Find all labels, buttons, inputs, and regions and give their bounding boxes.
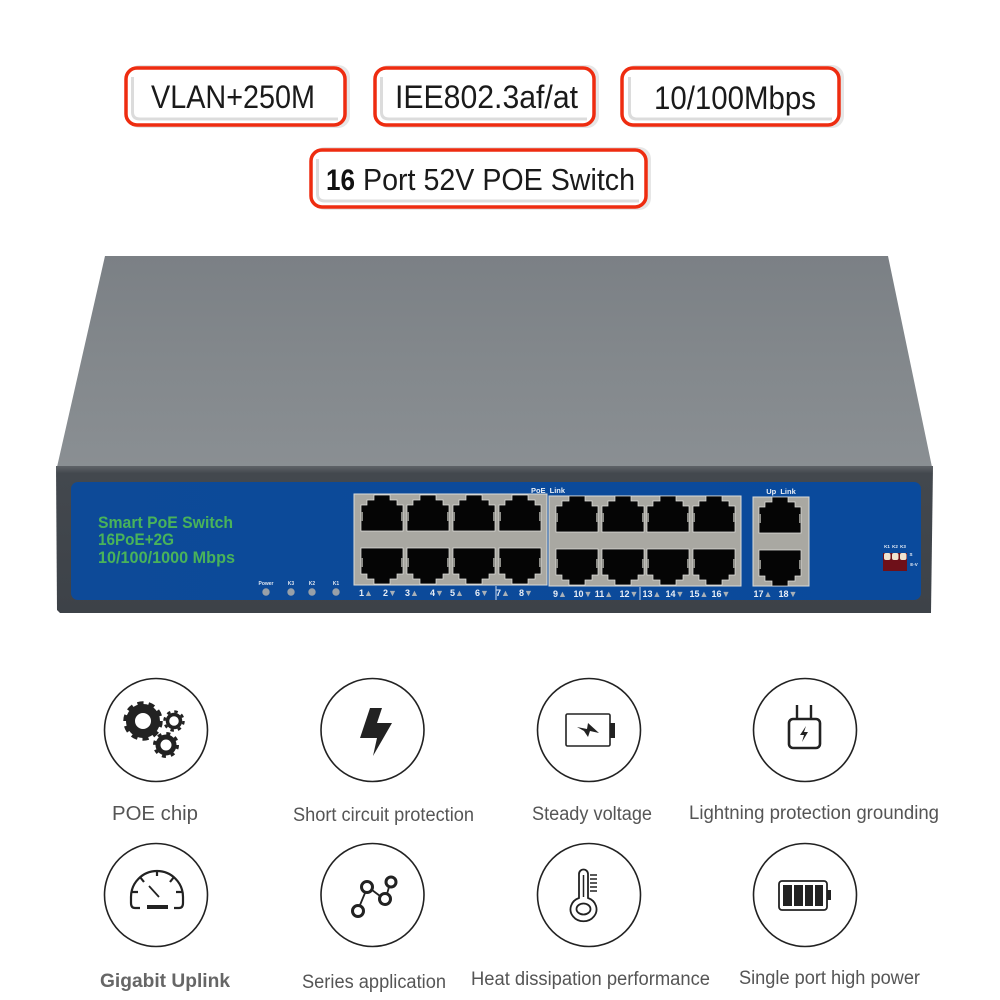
feature: Series application: Series application (302, 972, 446, 993)
feature: Short circuit protection (293, 678, 474, 826)
DIP switch: K2 (892, 544, 898, 549)
icon: gears (126, 704, 184, 756)
DIP switch: K1 (884, 544, 890, 549)
port block 1-8 (354, 494, 547, 585)
port numbers: 4▼ (430, 588, 444, 598)
PoE Link label: PoE Link (531, 486, 566, 495)
DIP switch: E-V (910, 562, 918, 567)
badge: 16 Port 52V POE Switch (311, 147, 651, 210)
switch top cover (57, 256, 932, 467)
panel product text: 10/100/1000 Mbps (98, 549, 235, 567)
badge: 16 Port 52V POE Switch: Port 52V POE Switch (363, 162, 635, 197)
status LEDs: Power (258, 581, 274, 587)
port numbers: 16▼ (712, 589, 730, 599)
switch front face (56, 466, 933, 613)
port numbers (359, 588, 797, 599)
status LEDs: K3 (288, 581, 294, 587)
feature: Single port high power: Single port high power (739, 968, 921, 989)
badge: IEE802.3af/at (375, 65, 599, 128)
feature: POE chip: POE chip (112, 803, 198, 825)
feature: Heat dissipation performance (471, 844, 710, 990)
switch device (56, 256, 933, 613)
feature: Steady voltage (532, 678, 652, 825)
DIP switch: K3 (900, 544, 906, 549)
port numbers: 10▼ (574, 589, 592, 599)
icon: battery with bolt (566, 714, 615, 746)
icon: full battery (779, 881, 831, 910)
feature: Short circuit protection: Short circuit protection (293, 805, 474, 826)
port numbers: 11▲ (595, 589, 613, 599)
port numbers: 12▼ (620, 589, 638, 599)
feature: Steady voltage: Steady voltage (532, 804, 652, 825)
feature: POE chip (104, 678, 208, 825)
port numbers: 2▼ (383, 588, 397, 598)
port numbers: 15▲ (690, 589, 708, 599)
status LEDs: K1 (333, 581, 339, 587)
badge: IEE802.3af/at: IEE802.3af/at (395, 79, 578, 115)
port numbers: 7▲ (496, 588, 510, 598)
icon: speedometer (131, 870, 183, 909)
DIP switch (883, 544, 918, 571)
feature: Gigabit Uplink (100, 844, 230, 992)
status LEDs (258, 581, 340, 596)
port numbers: 14▼ (666, 589, 684, 599)
icon: connected nodes (352, 877, 396, 916)
DIP switch: S (909, 552, 913, 557)
feature: Lightning protection grounding: Lightning protection grounding (689, 803, 939, 824)
icon: plug with bolt (789, 705, 820, 748)
uplink port block (753, 497, 809, 586)
port numbers: 3▲ (405, 588, 419, 598)
port numbers: 13▲ (643, 589, 661, 599)
icon: lightning bolt (360, 708, 392, 756)
feature: Series application (302, 844, 446, 993)
feature: Gigabit Uplink: Gigabit Uplink (100, 971, 230, 992)
feature: Single port high power (739, 844, 921, 989)
feature: Lightning protection grounding (689, 678, 939, 824)
port numbers: 9▲ (553, 589, 567, 599)
port numbers: 17▲ (754, 589, 772, 599)
badge: VLAN+250M: VLAN+250M (151, 79, 315, 115)
port numbers: 8▼ (519, 588, 533, 598)
Up Link label: Up Link (766, 487, 797, 496)
panel product text (98, 514, 235, 567)
feature: Heat dissipation performance: Heat dissipation performance (471, 969, 710, 990)
port block 9-16 (549, 496, 741, 586)
port numbers: 1▲ (359, 588, 373, 598)
icon: thermometer (570, 870, 597, 921)
badge: 10/100Mbps: 10/100Mbps (654, 80, 816, 116)
port numbers: 18▼ (779, 589, 797, 599)
blue front panel (71, 482, 921, 600)
status LEDs: K2 (309, 581, 315, 587)
badge: 16 Port 52V POE Switch: 16 (326, 164, 355, 197)
port numbers: 6▼ (475, 588, 489, 598)
badge: 10/100Mbps (622, 65, 844, 128)
panel product text: 16PoE+2G (98, 531, 174, 549)
panel product text: Smart PoE Switch (98, 514, 233, 532)
port numbers: 5▲ (450, 588, 464, 598)
badge: VLAN+250M (126, 65, 350, 128)
